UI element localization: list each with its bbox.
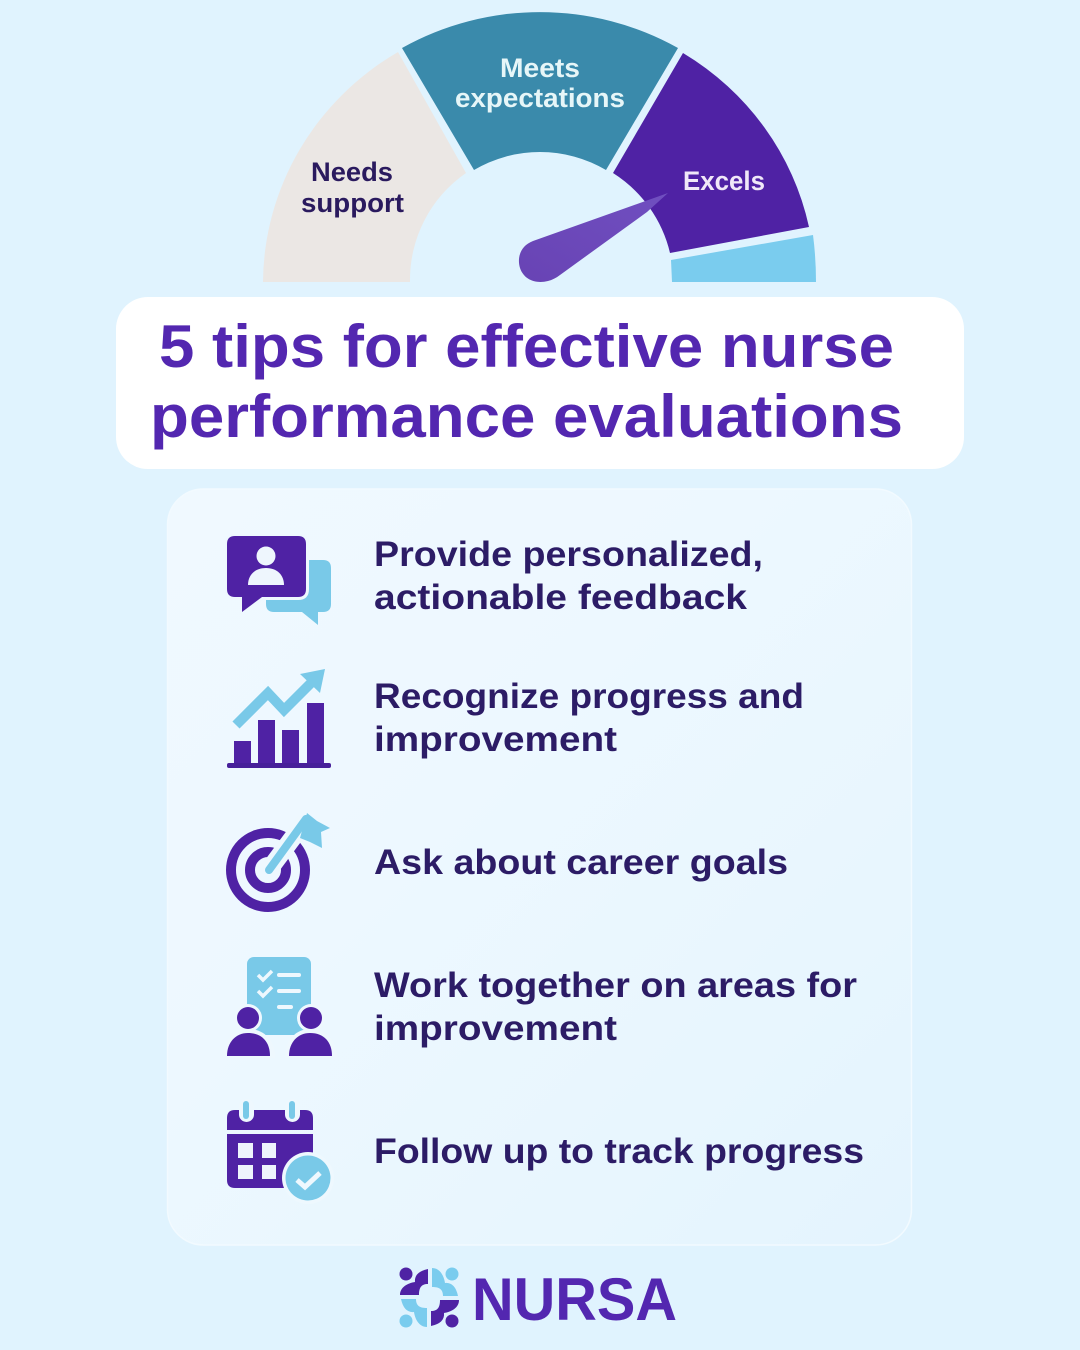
logo: NURSA [400, 1266, 677, 1333]
tip 4 [223, 957, 857, 1058]
tip text: Work together on areas for [374, 966, 857, 1005]
tip text [374, 535, 763, 617]
icon: target with flag [231, 813, 330, 907]
gauge needle [519, 193, 668, 282]
title [150, 313, 903, 450]
gauge segment: needs support: Needs [311, 157, 393, 187]
logo wordmark: NURSA [472, 1266, 677, 1333]
tip text: improvement [374, 1009, 617, 1048]
gauge segment: meets expectations [402, 12, 678, 170]
tip text [374, 677, 804, 759]
icon: feedback speech bubbles [225, 534, 331, 625]
tip 3 [231, 813, 788, 907]
gauge segment: excels [613, 53, 809, 253]
tip text: Provide personalized, [374, 535, 763, 574]
icon: calendar with check [227, 1099, 334, 1204]
gauge segment: meets expectations: Meets [500, 53, 580, 83]
tip text: Follow up to track progress [374, 1132, 864, 1171]
tip 1 [225, 534, 763, 625]
title: 5 tips for effective nurse [159, 313, 894, 380]
title banner [116, 297, 964, 469]
tip text: actionable feedback [374, 578, 748, 617]
tip text: improvement [374, 720, 617, 759]
title: performance evaluations [150, 383, 903, 450]
tip text: Ask about career goals [374, 843, 788, 882]
gauge segment: excels: Excels [683, 166, 765, 196]
icon: growth chart [227, 669, 331, 768]
tip text [374, 966, 857, 1048]
gauge chart [263, 12, 816, 282]
tip 2 [227, 669, 804, 768]
gauge segment: needs support [263, 52, 466, 282]
icon: shared checklist [223, 957, 337, 1058]
panel: tips card [168, 489, 912, 1245]
tip 5 [227, 1099, 864, 1204]
gauge segment: top tier [671, 235, 816, 282]
gauge segment: meets expectations: expectations [455, 83, 625, 113]
gauge segment: needs support: support [301, 188, 404, 218]
tip text: Recognize progress and [374, 677, 804, 716]
icon: logo mark [400, 1268, 459, 1328]
